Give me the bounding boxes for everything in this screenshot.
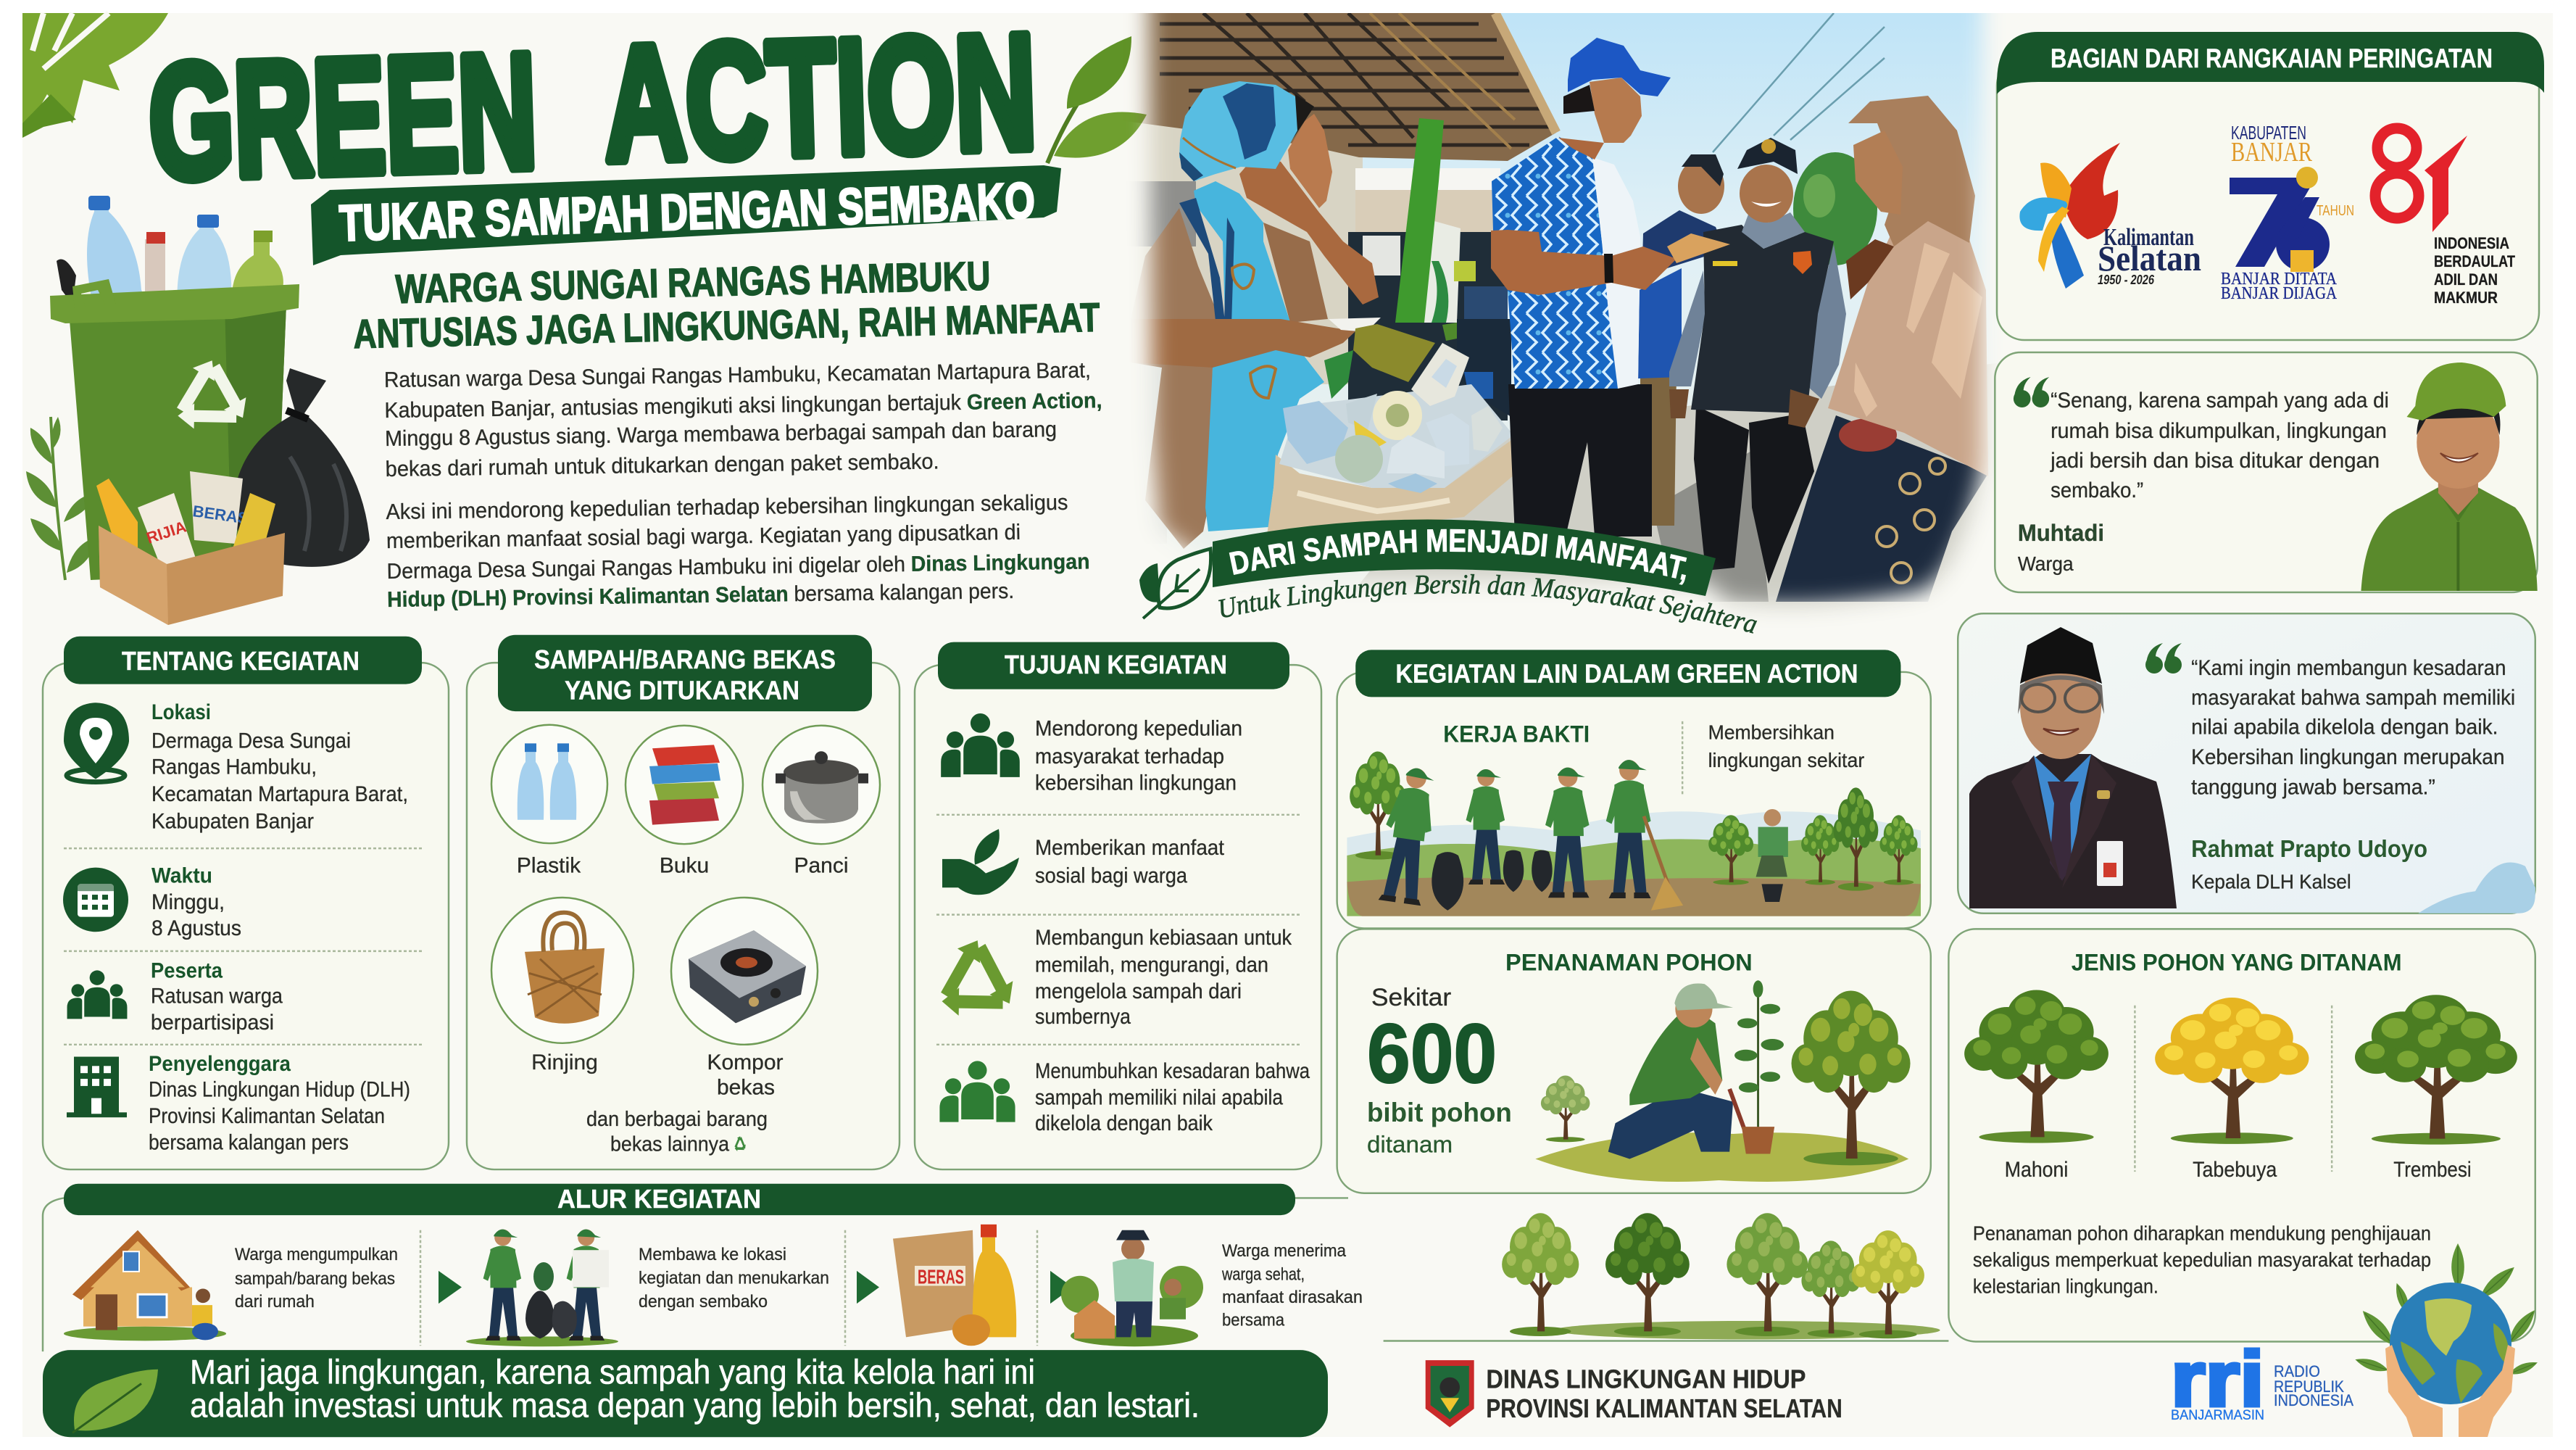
illustration: planting <box>1535 980 1911 1182</box>
intro text: Aksi ini mendorong kepedulian terhadap kebersihan lingkungan sekaligus <box>386 491 1068 524</box>
market background <box>1139 123 1363 384</box>
icon: community <box>941 713 1020 777</box>
footer organisation name: DINAS LINGKUNGAN HIDUP <box>1486 1364 1806 1394</box>
panel: Tentang Kegiatan: Dermaga Desa Sungai <box>151 729 351 753</box>
logo: Kabupaten Banjar 76 <box>2221 122 2354 303</box>
panel: Tujuan Kegiatan: dikelola dengan baik <box>1035 1111 1213 1135</box>
panel: Kegiatan lain: lingkungan sekitar <box>1708 749 1864 771</box>
garbage bag <box>233 368 370 567</box>
sapling <box>1757 982 1759 1145</box>
logo: Kabupaten Banjar 76: BANJAR DITATA <box>2221 270 2338 289</box>
panel: Tujuan Kegiatan: sampah memiliki nilai apabila <box>1035 1086 1283 1109</box>
intro text: Dermaga Desa Sungai Rangas Hambuku ini digelar oleh Dinas Lingkungan <box>386 550 1090 584</box>
heading: Bagian dari rangkaian peringatan: BAGIAN DARI RANGKAIAN PERINGATAN <box>2051 44 2493 73</box>
heading <box>64 1184 1295 1215</box>
tree: Tabebuya <box>2155 998 2309 1144</box>
panel: Tujuan Kegiatan <box>915 642 1321 1169</box>
arrow <box>1050 1271 1073 1304</box>
illustration: globe in hands <box>2353 1243 2539 1437</box>
subtitle banner: TUKAR SAMPAH DENGAN SEMBAKO <box>338 172 1036 252</box>
panel: Tujuan Kegiatan: kebersihan lingkungan <box>1035 771 1237 795</box>
panel: Penanaman pohon: PENANAMAN POHON <box>1505 950 1753 976</box>
panel: Alur Kegiatan: Warga menerima <box>1222 1241 1347 1261</box>
panel: Penanaman pohon: 600 <box>1367 1006 1497 1101</box>
headline <box>353 252 1100 357</box>
illustration: rice and oil: BERAS <box>918 1266 964 1288</box>
panel: Tujuan Kegiatan: sosial bagi warga <box>1035 864 1187 887</box>
panel: Sampah/Barang bekas: Rinjing <box>531 1051 598 1074</box>
person: man in batik shirt <box>1491 38 1677 536</box>
panel: Tentang Kegiatan: bersama kalangan pers <box>149 1131 349 1154</box>
panel: Alur Kegiatan: Warga mengumpulkan <box>235 1245 398 1264</box>
heading <box>938 642 1289 689</box>
panel: Jenis pohon <box>1948 929 2535 1342</box>
panel: Alur Kegiatan: sampah/barang bekas <box>235 1269 395 1289</box>
panel: Penanaman pohon: ditanam <box>1367 1132 1453 1158</box>
logo: Kabupaten Banjar 76: TAHUN <box>2317 203 2354 219</box>
heading: ALUR KEGIATAN <box>557 1184 761 1214</box>
logo: Kalimantan Selatan: 1950 - 2026 <box>2098 273 2155 287</box>
intro text <box>384 358 1105 612</box>
tree: Mahoni <box>1964 990 2108 1143</box>
person: woman left <box>1131 81 1381 549</box>
logo: RRI: RADIO <box>2274 1362 2320 1380</box>
footer organisation name <box>1486 1364 1842 1423</box>
panel: Tentang Kegiatan: Kecamatan Martapura Barat, <box>151 782 408 806</box>
panel: Sampah/Barang bekas: Panci <box>794 854 849 878</box>
heading: YANG DITUKARKAN <box>565 676 799 705</box>
panel: Kegiatan lain <box>1337 650 1931 928</box>
panel: quote Rahmat Prapto Udoyo: “Kami ingin membangun kesadaran <box>2191 656 2506 680</box>
call to action banner: adalah investasi untuk masa depan yang lebih bersih, sehat, dan lestari. <box>190 1387 1200 1425</box>
icon: people group <box>939 1061 1015 1122</box>
panel: Penanaman pohon <box>1337 929 1931 1193</box>
person planting <box>1608 1088 1733 1159</box>
panel: Penanaman pohon: Sekitar <box>1371 984 1451 1011</box>
icon: leaf <box>72 1370 158 1433</box>
bottles <box>87 196 152 312</box>
icon: recycle on bin <box>177 360 260 447</box>
logo: RRI: REPUBLIK <box>2274 1378 2344 1396</box>
heading: TUJUAN KEGIATAN <box>1005 650 1227 679</box>
heading: Bagian dari rangkaian peringatan <box>1997 32 2544 94</box>
panel: anniversary logos <box>1997 32 2544 340</box>
panel: quote Muhtadi: Warga <box>2018 552 2074 575</box>
panel: Jenis pohon: JENIS POHON YANG DITANAM <box>2072 950 2402 976</box>
panel: Kegiatan lain: KERJA BAKTI <box>1443 721 1590 747</box>
panel: Jenis pohon: kelestarian lingkungan. <box>1973 1275 2159 1298</box>
item: rinjing <box>491 898 633 1043</box>
headline: WARGA SUNGAI RANGAS HAMBUKU <box>395 252 991 312</box>
icon: quote mark <box>2145 643 2182 674</box>
logo: Kalimantan Selatan: Selatan <box>2098 238 2201 278</box>
panel: quote Rahmat Prapto Udoyo: masyarakat bahwa sampah memiliki <box>2191 686 2515 710</box>
panel: Tentang Kegiatan: 8 Agustus <box>151 916 241 940</box>
heading <box>1355 650 1900 697</box>
ground <box>1357 364 1992 613</box>
footer organisation name: PROVINSI KALIMANTAN SELATAN <box>1486 1393 1842 1423</box>
icon: corner leaves top-left <box>22 13 168 138</box>
icon: leaf badge <box>1139 549 1211 618</box>
panel: Jenis pohon: Penanaman pohon diharapkan mendukung penghijauan <box>1973 1222 2431 1245</box>
panel: Alur Kegiatan: warga sehat, <box>1221 1265 1305 1285</box>
icon: calendar <box>63 868 128 932</box>
logo: RRI: BANJARMASIN <box>2171 1408 2264 1423</box>
item: buku <box>626 726 743 844</box>
panel: Tujuan Kegiatan: Membangun kebiasaan untuk <box>1035 926 1292 950</box>
icon: quote mark <box>2014 377 2049 407</box>
panel: quote Muhtadi: jadi bersih dan bisa ditukar dengan <box>2050 449 2380 473</box>
logo: RRI <box>2171 1335 2353 1423</box>
headline: ANTUSIAS JAGA LINGKUNGAN, RAIH MANFAAT <box>353 294 1100 357</box>
arm to head <box>1239 157 1379 304</box>
panel: Jenis pohon: sekaligus memperkuat kepedulian masyarakat terhadap <box>1973 1248 2431 1271</box>
arrow <box>857 1271 879 1304</box>
panel: Tujuan Kegiatan: sumbernya <box>1035 1005 1131 1029</box>
panel: quote Muhtadi: rumah bisa dikumpulkan, lingkungan <box>2051 419 2387 443</box>
panel: Alur Kegiatan: manfaat dirasakan <box>1222 1288 1363 1307</box>
panel: Tentang Kegiatan: berpartisipasi <box>151 1011 274 1035</box>
panel: Jenis pohon: Tabebuya <box>2193 1158 2277 1182</box>
illustration: rice and oil <box>893 1225 1016 1346</box>
panel: Sampah/Barang bekas: bekas lainnya <box>610 1133 729 1156</box>
script tagline: Untuk Lingkungen Bersih dan Masyarakat Sejahtera <box>1218 574 1757 634</box>
panel: Alur Kegiatan: bersama <box>1222 1311 1285 1330</box>
panel: Tujuan Kegiatan: mengelola sampah dari <box>1035 979 1242 1003</box>
intro text: Kabupaten Banjar, antusias mengikuti aksi lingkungan bertajuk Green Action, <box>384 389 1102 423</box>
logo: Kabupaten Banjar 76: BANJAR DIJAGA <box>2221 284 2338 303</box>
roof <box>1132 13 1556 161</box>
logo: 81 Indonesia: MAKMUR <box>2434 289 2498 307</box>
logo: Kalimantan Selatan: Kalimantan <box>2103 224 2194 251</box>
panel: Alur Kegiatan <box>43 1184 1363 1351</box>
logo: RRI: rri <box>2171 1335 2264 1422</box>
panel: Tentang Kegiatan: Penyelenggara <box>149 1052 291 1076</box>
item: plastik <box>491 725 607 843</box>
panel: Sampah/Barang bekas: Buku <box>660 854 709 878</box>
panel: quote Rahmat Prapto Udoyo: nilai apabila dikelola dengan baik. <box>2191 716 2498 740</box>
photo: community event <box>1132 13 1994 615</box>
forearm and paper <box>1131 319 1355 368</box>
logo: DLH emblem <box>1426 1360 1474 1428</box>
item: panci <box>763 726 880 844</box>
panel: quote Muhtadi: “Senang, karena sampah yang ada di <box>2051 389 2389 413</box>
photo: Rahmat portrait <box>1969 627 2177 908</box>
icon: recycle <box>941 940 1028 1035</box>
call to action banner <box>43 1350 1328 1437</box>
tree behind <box>1793 152 1877 265</box>
hijab <box>1179 81 1297 181</box>
heading <box>64 637 422 684</box>
call to action banner: Mari jaga lingkungan, karena sampah yang kita kelola hari ini <box>190 1354 1035 1391</box>
illustration: house <box>64 1230 226 1341</box>
logo: 81 Indonesia: BERDAULAT <box>2434 252 2515 270</box>
panel: Alur Kegiatan: dari rumah <box>235 1292 315 1312</box>
plant left <box>26 417 98 580</box>
heading <box>498 635 872 711</box>
panel: quote Muhtadi: Muhtadi <box>2018 520 2104 546</box>
icon: hand with leaf <box>942 829 1019 895</box>
ribbon: Dari sampah menjadi manfaat: DARI SAMPAH MENJADI MANFAAT, <box>1229 529 1687 585</box>
bin <box>69 304 286 580</box>
title: GREEN ACTION <box>146 0 1039 213</box>
panel: Sampah/Barang bekas <box>467 635 899 1169</box>
panel: Tujuan Kegiatan: memilah, mengurangi, dan <box>1035 953 1268 977</box>
illustration: Muhtadi portrait <box>2361 362 2538 591</box>
logo: RRI: INDONESIA <box>2274 1391 2353 1409</box>
arrow <box>439 1271 462 1304</box>
icon: small recycle <box>734 1136 748 1155</box>
panel: Kegiatan lain: Membersihkan <box>1708 721 1835 744</box>
panel: Tujuan Kegiatan: masyarakat terhadap <box>1035 745 1224 768</box>
panel: Alur Kegiatan: dengan sembako <box>639 1292 768 1312</box>
person: back man <box>1638 154 1725 526</box>
logo: 81 Indonesia: INDONESIA <box>2434 234 2509 252</box>
illustration: row of trees <box>1384 1213 1948 1341</box>
panel: Tujuan Kegiatan: Menumbuhkan kesadaran bahwa <box>1035 1059 1310 1083</box>
illustration: recycling bin with bottles, bag and food box: BERAS <box>191 502 249 528</box>
panel: Sampah/Barang bekas: Kompor <box>707 1051 784 1074</box>
scarf lower <box>1194 181 1324 531</box>
dress <box>1137 208 1216 549</box>
basket of plastic bottles <box>1266 343 1518 540</box>
panel: Tentang Kegiatan: Ratusan warga <box>151 985 283 1008</box>
panel: Sampah/Barang bekas: bekas <box>717 1076 775 1100</box>
panel: Tujuan Kegiatan: Mendorong kepedulian <box>1035 717 1242 740</box>
person: officer in dark uniform <box>1667 138 1846 584</box>
panel: quote Rahmat Prapto Udoyo: tanggung jawab bersama.” <box>2191 775 2435 799</box>
intro text: Hidup (DLH) Provinsi Kalimantan Selatan bersama kalangan pers. <box>387 579 1014 612</box>
icon: participants <box>67 970 127 1019</box>
tree: Trembesi <box>2355 995 2517 1145</box>
logo: Kalimantan Selatan <box>2019 143 2201 289</box>
intro text: Ratusan warga Desa Sungai Rangas Hambuku, Kecamatan Martapura Barat, <box>384 358 1091 392</box>
illustration: recycling bin with bottles, bag and food box: RIJIA <box>144 518 188 547</box>
panel: Jenis pohon: Mahoni <box>2005 1158 2068 1182</box>
olive sleeve and green clothes <box>1353 324 1435 382</box>
item: kompor <box>671 898 818 1045</box>
logo: 81 Indonesia: ADIL DAN <box>2434 270 2498 289</box>
panel: Tentang Kegiatan: Provinsi Kalimantan Selatan <box>149 1104 385 1128</box>
illustration: healthy family <box>1061 1230 1203 1346</box>
panel: quote Rahmat Prapto Udoyo <box>1958 613 2535 914</box>
intro text: Minggu 8 Agustus siang. Warga membawa berbagai sampah dan barang <box>385 418 1057 451</box>
panel: Jenis pohon: Trembesi <box>2393 1158 2472 1182</box>
heading: KEGIATAN LAIN DALAM GREEN ACTION <box>1395 659 1858 689</box>
heading: SAMPAH/BARANG BEKAS <box>534 645 836 674</box>
logo: Kabupaten Banjar 76: KABUPATEN <box>2231 122 2306 144</box>
panel: quote Rahmat Prapto Udoyo: Rahmat Prapto Udoyo <box>2191 836 2427 863</box>
panel: Sampah/Barang bekas: Plastik <box>517 854 581 878</box>
intro text: bekas dari rumah untuk ditukarkan dengan paket sembako. <box>385 450 939 481</box>
panel: Tentang Kegiatan: Dinas Lingkungan Hidup (DLH) <box>149 1078 410 1102</box>
navy straps <box>1179 198 1234 319</box>
panel: Tujuan Kegiatan: Memberikan manfaat <box>1035 836 1225 860</box>
face <box>1288 114 1332 208</box>
panel: Tentang Kegiatan: Minggu, <box>151 890 225 914</box>
panel: Alur Kegiatan: Membawa ke lokasi <box>639 1245 786 1264</box>
icon: location pin <box>64 703 129 782</box>
panel: Alur Kegiatan: kegiatan dan menukarkan <box>639 1269 829 1288</box>
illustration: people exchange <box>466 1230 618 1346</box>
panel: Tentang Kegiatan: Peserta <box>151 958 223 982</box>
illustration: recycling bin with bottles, bag and food box <box>26 196 370 625</box>
food items <box>96 478 138 558</box>
person: woman right <box>1776 96 1988 602</box>
subtitle banner <box>311 165 1061 265</box>
icon: building <box>67 1057 127 1117</box>
logo: Kabupaten Banjar 76: BANJAR <box>2231 137 2312 167</box>
intro text: memberikan manfaat sosial bagi warga. Kegiatan yang dipusatkan di <box>386 521 1021 553</box>
green post <box>1395 118 1444 323</box>
panel: Tentang Kegiatan: Waktu <box>151 864 212 887</box>
panel: Tentang Kegiatan: Lokasi <box>151 700 211 724</box>
power lines <box>1713 13 1885 152</box>
icon: leaf branch by title <box>1047 36 1147 163</box>
panel: quote Muhtadi <box>1995 352 2538 592</box>
panel: Sampah/Barang bekas: dan berbagai barang <box>586 1108 768 1131</box>
title: GREEN ACTION: GREEN <box>146 19 539 213</box>
box <box>99 526 285 625</box>
panel: Tentang Kegiatan: Kabupaten Banjar <box>151 810 314 833</box>
panel: quote Rahmat Prapto Udoyo: Kebersihan lingkungan merupakan <box>2191 745 2504 769</box>
panel: quote Muhtadi: sembako.” <box>2051 478 2143 502</box>
panel: Penanaman pohon: bibit pohon <box>1367 1097 1512 1127</box>
panel: quote Rahmat Prapto Udoyo: Kepala DLH Kalsel <box>2191 870 2351 892</box>
heading: TENTANG KEGIATAN <box>122 646 360 676</box>
panel: Tentang Kegiatan: Rangas Hambuku, <box>151 755 317 779</box>
logo: 81 Indonesia <box>2375 128 2515 307</box>
illustration: cleanup <box>1347 751 1921 916</box>
panel: Tentang Kegiatan <box>43 637 449 1169</box>
